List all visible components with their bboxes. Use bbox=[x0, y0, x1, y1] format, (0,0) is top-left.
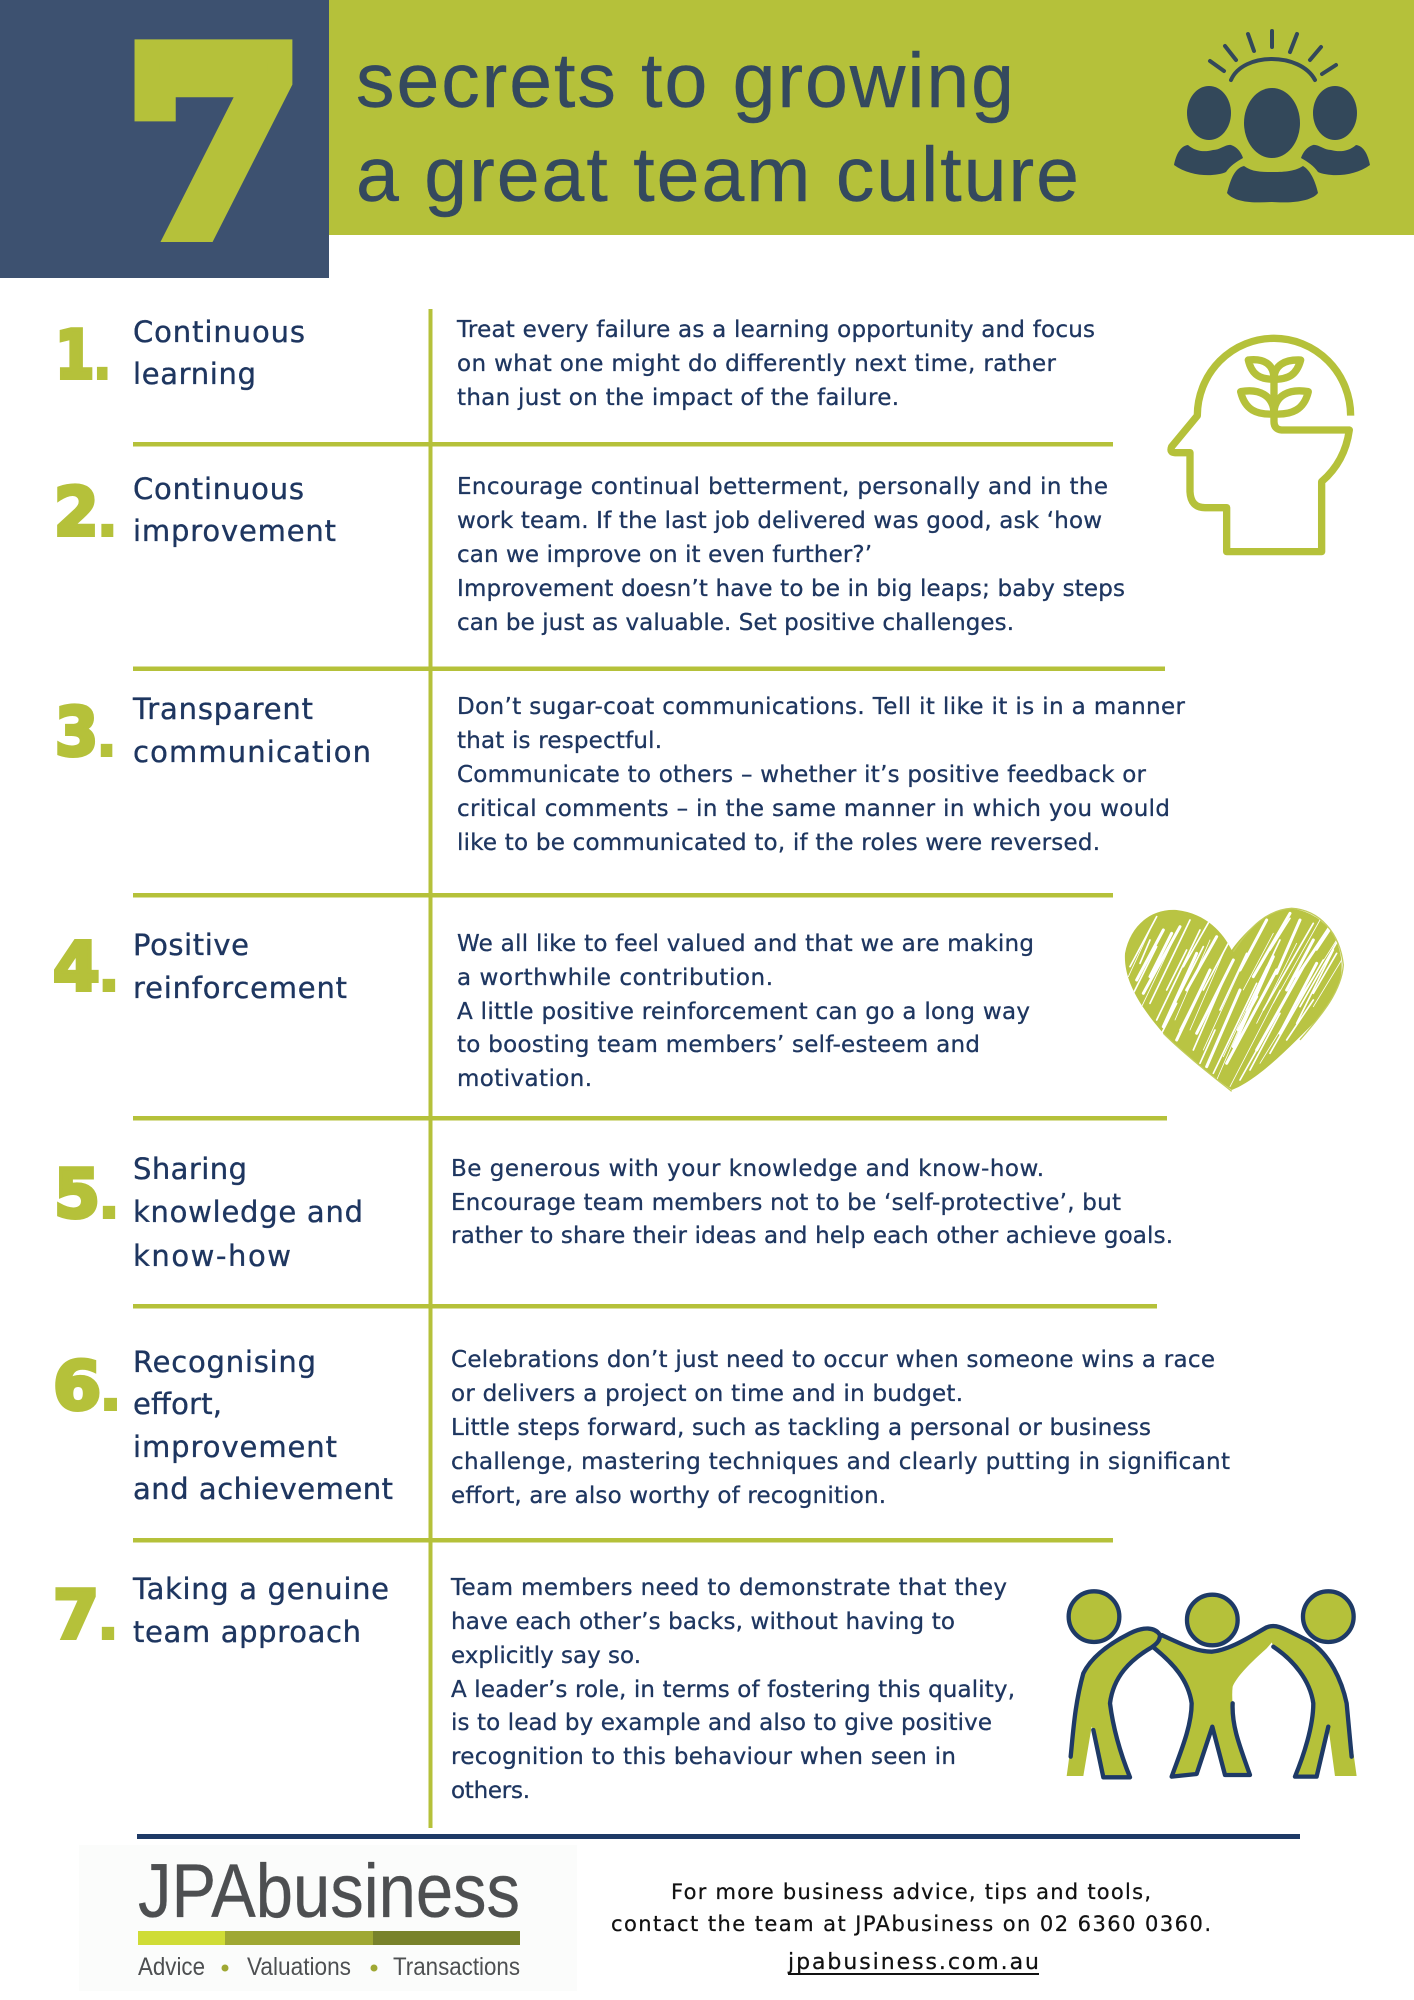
icon: head with plant bbox=[1171, 338, 1351, 552]
body 4: a worthwhile contribution. bbox=[457, 965, 773, 991]
body 2: work team. If the last job delivered was good, ask ‘how bbox=[457, 508, 1102, 534]
footer contact text: For more business advice, tips and tools, bbox=[671, 1880, 1151, 1904]
number 4: 4. bbox=[53, 928, 118, 1006]
title bbox=[356, 38, 1079, 218]
heading 4 bbox=[133, 928, 347, 1005]
heading 3: Transparent bbox=[132, 692, 313, 726]
body 3: like to be communicated to, if the roles were reversed. bbox=[457, 830, 1100, 856]
heading 6: improvement bbox=[133, 1430, 337, 1464]
heading 5 bbox=[133, 1152, 363, 1273]
row 7: genuine team approach bbox=[53, 1572, 1015, 1804]
heading 5: knowledge and bbox=[133, 1195, 363, 1229]
row 1: continuous learning bbox=[55, 315, 1095, 411]
body 4: A little positive reinforcement can go a long way bbox=[457, 999, 1030, 1025]
row 6: recognising effort bbox=[53, 1345, 1230, 1509]
heading 3 bbox=[132, 692, 371, 769]
heading 6: effort, bbox=[133, 1387, 222, 1421]
body 3: that is respectful. bbox=[457, 728, 662, 754]
body 7: have each other’s backs, without having to bbox=[451, 1609, 955, 1635]
body 7: is to lead by example and also to give positive bbox=[451, 1710, 992, 1736]
logo: JPAbusiness: Advice bbox=[138, 1953, 205, 1981]
body 1: than just on the impact of the failure. bbox=[457, 385, 899, 411]
body 2: Encourage continual betterment, personally and in the bbox=[457, 474, 1108, 500]
big number 7: 7 bbox=[127, 1, 301, 288]
body 5: Encourage team members not to be ‘self-protective’, but bbox=[451, 1190, 1121, 1216]
body 6: effort, are also worthy of recognition. bbox=[451, 1483, 886, 1509]
body 7: others. bbox=[451, 1778, 530, 1804]
body 7: explicitly say so. bbox=[451, 1643, 641, 1669]
heading 7 bbox=[132, 1572, 389, 1649]
row 5: sharing knowledge bbox=[54, 1152, 1173, 1273]
body 6 bbox=[451, 1347, 1230, 1509]
body 7: recognition to this behaviour when seen in bbox=[451, 1744, 956, 1770]
footer contact text: contact the team at JPAbusiness on 02 6360 0360. bbox=[611, 1912, 1211, 1936]
body 3: Communicate to others – whether it’s positive feedback or bbox=[457, 762, 1147, 788]
body 6: Celebrations don’t just need to occur when someone wins a race bbox=[451, 1347, 1215, 1373]
heading 5: Sharing bbox=[133, 1152, 247, 1186]
body 4 bbox=[457, 931, 1034, 1092]
body 4: We all like to feel valued and that we are making bbox=[457, 931, 1034, 957]
body 2: can we improve on it even further?’ bbox=[457, 542, 872, 568]
title: secrets to growing bbox=[356, 38, 1014, 124]
body 6: or delivers a project on time and in budget. bbox=[451, 1381, 963, 1407]
title: a great team culture bbox=[356, 132, 1079, 218]
body 5 bbox=[451, 1156, 1173, 1249]
row 2: continuous improvement bbox=[54, 472, 1125, 636]
body 5: rather to share their ideas and help each other achieve goals. bbox=[451, 1223, 1173, 1249]
number 3: 3. bbox=[55, 693, 115, 771]
row 4: positive reinforcement bbox=[53, 928, 1034, 1092]
icon: three people with arms linked bbox=[1067, 1591, 1357, 1777]
number 7: 7. bbox=[53, 1576, 117, 1654]
heading 2: improvement bbox=[133, 514, 336, 548]
footer contact text bbox=[611, 1880, 1211, 1975]
heading 7: Taking a genuine bbox=[132, 1572, 389, 1606]
number 6: 6. bbox=[53, 1347, 120, 1425]
vertical divider bbox=[428, 309, 432, 1828]
heading 6: and achievement bbox=[133, 1472, 393, 1506]
heading 2 bbox=[133, 472, 336, 548]
body 6: challenge, mastering techniques and clearly putting in significant bbox=[451, 1449, 1230, 1475]
heading 1: learning bbox=[133, 357, 256, 391]
body 7: A leader’s role, in terms of fostering this quality, bbox=[451, 1677, 1015, 1703]
number 1: 1. bbox=[55, 316, 110, 394]
footer rule bbox=[137, 1834, 1300, 1839]
body 4: motivation. bbox=[457, 1066, 592, 1092]
footer contact text: jpabusiness.com.au bbox=[787, 1950, 1039, 1975]
body 1: on what one might do differently next time, rather bbox=[457, 351, 1057, 377]
logo: JPAbusiness: JPAbusiness bbox=[138, 1849, 520, 1934]
body 3: critical comments – in the same manner in which you would bbox=[457, 796, 1170, 822]
number 5: 5. bbox=[54, 1155, 118, 1233]
body 7 bbox=[450, 1575, 1015, 1804]
heading 7: team approach bbox=[133, 1615, 361, 1649]
body 3: Don’t sugar-coat communications. Tell it like it is in a manner bbox=[457, 694, 1186, 720]
body 6: Little steps forward, such as tackling a personal or business bbox=[451, 1415, 1151, 1441]
heading 5: know-how bbox=[133, 1239, 291, 1273]
heading 1: Continuous bbox=[133, 315, 305, 349]
heading 2: Continuous bbox=[133, 472, 304, 506]
heading 6 bbox=[133, 1345, 393, 1506]
body 1: Treat every failure as a learning opportunity and focus bbox=[456, 317, 1095, 343]
body 3 bbox=[457, 694, 1186, 856]
number 2: 2. bbox=[54, 473, 116, 551]
body 1 bbox=[456, 317, 1095, 411]
heading 3: communication bbox=[133, 735, 371, 769]
body 7: Team members need to demonstrate that they bbox=[450, 1575, 1007, 1601]
row 3: transparent communication bbox=[55, 692, 1186, 856]
icon: team with sun rays bbox=[1174, 31, 1370, 202]
body 2 bbox=[457, 474, 1125, 636]
heading 4: reinforcement bbox=[133, 971, 347, 1005]
body 2: can be just as valuable. Set positive challenges. bbox=[457, 610, 1014, 636]
icon: scribbled heart bbox=[1125, 908, 1343, 1091]
heading 1 bbox=[133, 315, 305, 391]
logo: JPAbusiness: Transactions bbox=[393, 1953, 520, 1981]
header banner bbox=[0, 0, 1414, 288]
heading 4: Positive bbox=[133, 928, 249, 962]
logo: JPAbusiness bbox=[79, 1845, 577, 1991]
body 4: to boosting team members’ self-esteem and bbox=[457, 1032, 980, 1058]
body 5: Be generous with your knowledge and know-how. bbox=[451, 1156, 1044, 1182]
body 2: Improvement doesn’t have to be in big leaps; baby steps bbox=[457, 576, 1125, 602]
heading 6: Recognising bbox=[133, 1345, 316, 1379]
logo: JPAbusiness: Valuations bbox=[247, 1953, 351, 1981]
